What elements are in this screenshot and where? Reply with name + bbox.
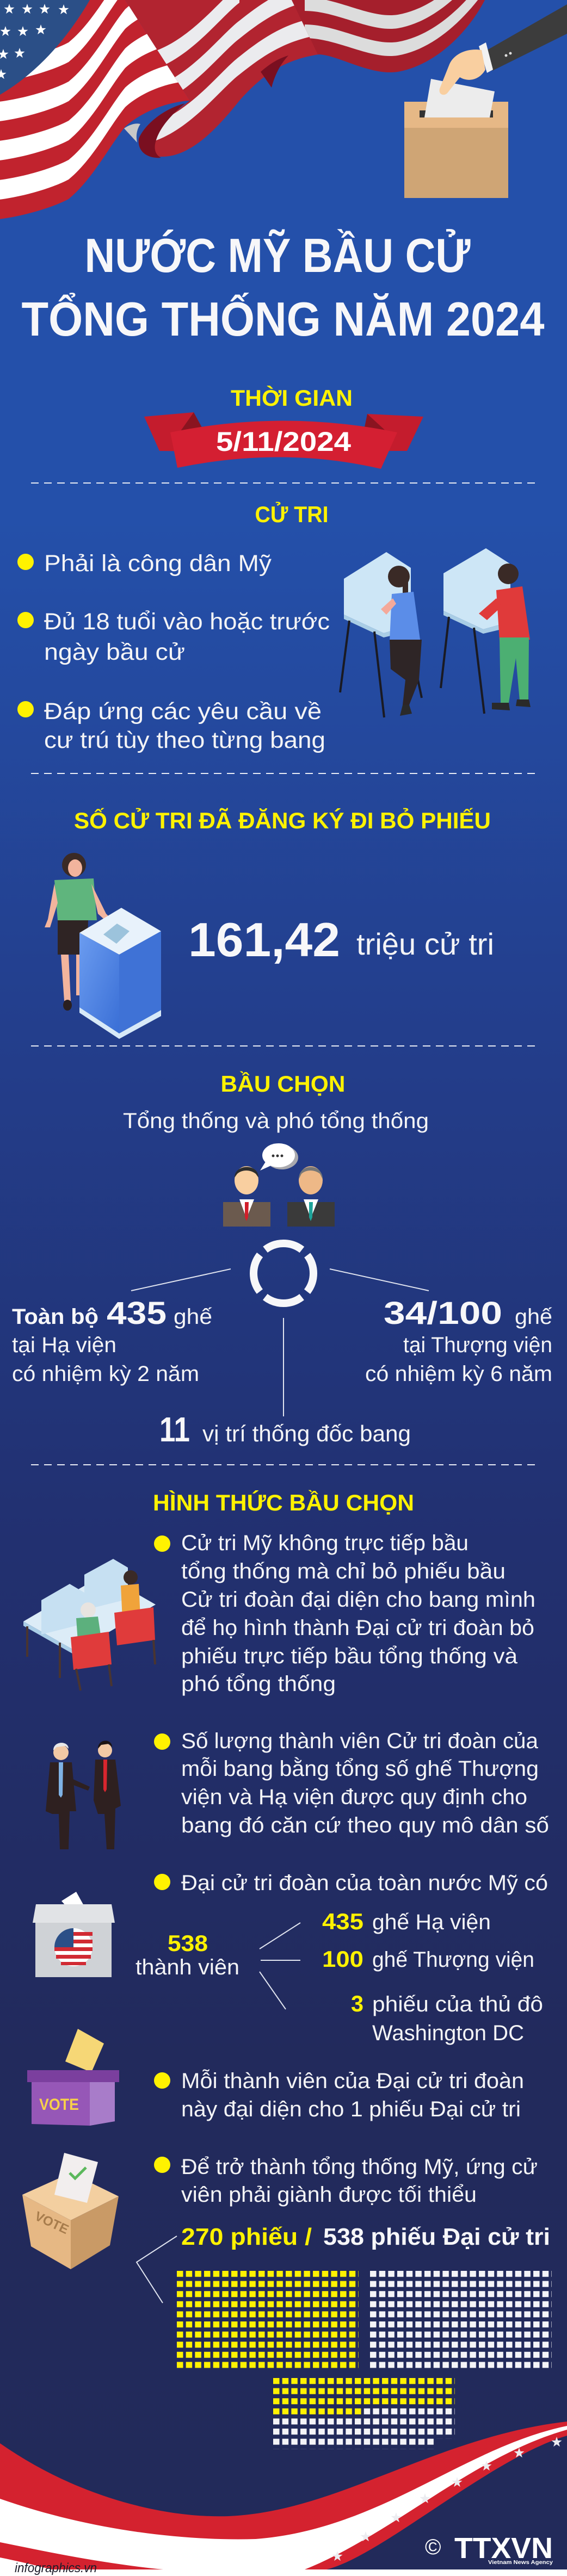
stat: house seats: [12, 1296, 212, 1386]
stat: registered voters number: 161,42: [188, 913, 340, 967]
heading: thời gian: THỜI GIAN: [231, 385, 353, 411]
stat: senate seats: [365, 1296, 552, 1386]
ribbon with date: [144, 412, 423, 469]
illustration: voters in booths: [340, 548, 531, 717]
icon: hand putting ballot into box: [404, 4, 567, 198]
text block: indirect election: tổng thống mà chỉ bỏ phiếu bầu: [181, 1559, 506, 1583]
diagram: 538 breakdown: 100: [322, 1946, 363, 1972]
ribbon with date: 5/11/2024: [216, 426, 351, 457]
list: voter requirements: [17, 550, 330, 753]
text block: indirect election: Cử tri đoàn đại diện cho bang mình: [181, 1588, 535, 1612]
logo: TTXVN: ©: [425, 2535, 441, 2559]
stat: 270 of 538 electoral votes: 538 phiếu Đại cử tri: [323, 2224, 550, 2250]
text block: electors per state: [154, 1729, 549, 1837]
stat: 270 of 538 electoral votes: 270 phiếu /: [181, 2224, 312, 2250]
heading: bầu chọn: BẦU CHỌN: [221, 1071, 345, 1097]
text block: 270 to win: Để trở thành tổng thống Mỹ, ứng cử: [181, 2155, 538, 2179]
list: voter requirements: ngày bầu cử: [44, 639, 185, 665]
text block: indirect election: Cử tri Mỹ không trực tiếp bầu: [181, 1531, 469, 1555]
illustration: two businessmen: [46, 1741, 121, 1849]
icon: grey ballot box with US flag: [33, 1892, 115, 1977]
illustration: voters at desks: [23, 1559, 156, 1691]
stat: house seats: có nhiệm kỳ 2 năm: [12, 1362, 199, 1386]
diagram: 538 breakdown: 435: [322, 1909, 363, 1934]
stat: senate seats: ghế: [515, 1305, 552, 1329]
stat: registered voters number: triệu cử tri: [356, 927, 494, 961]
diagram: 538 breakdown: 3: [351, 1991, 363, 2016]
stat: governors: vị trí thống đốc bang: [202, 1421, 411, 1446]
text block: electors per state: Số lượng thành viên Cử tri đoàn của: [181, 1729, 539, 1753]
list: voter requirements: Phải là công dân Mỹ: [44, 550, 272, 577]
title: NƯỚC MỸ BẦU CỬ: [85, 228, 470, 282]
logo: TTXVN: TTXVN: [454, 2532, 553, 2565]
text block: one elector one vote: này đại diện cho 1 phiếu Đại cử tri: [181, 2097, 521, 2121]
diagram: 538 breakdown: ghế Thượng viện: [372, 1948, 534, 1972]
heading: hình thức bầu chọn: HÌNH THỨC BẦU CHỌN: [153, 1489, 414, 1515]
stat: 270 of 538 electoral votes: [137, 2224, 550, 2303]
text block: 270 to win: [154, 2155, 538, 2207]
diagram: 538 breakdown: Washington DC: [372, 2021, 524, 2045]
list: voter requirements: cư trú tùy theo từng bang: [44, 727, 325, 753]
heading: cử tri: CỬ TRI: [255, 501, 329, 527]
stat: house seats: Toàn bộ: [12, 1305, 98, 1329]
stat: house seats: ghế: [174, 1305, 212, 1329]
logo: TTXVN: Vietnam News Agency: [488, 2560, 553, 2566]
icon: purple VOTE box: VOTE: [39, 2096, 79, 2114]
icon: purple VOTE box: [27, 2029, 119, 2126]
heading: registered voters: SỐ CỬ TRI ĐÃ ĐĂNG KÝ ĐI BỎ PHIẾU: [74, 807, 491, 833]
icon: two candidates with speech bubble: [223, 1143, 335, 1227]
stat: senate seats: tại Thượng viện: [403, 1333, 552, 1357]
stat: house seats: tại Hạ viện: [12, 1333, 116, 1357]
text block: electors per state: mỗi bang bằng tổng số ghế Thượng: [181, 1756, 539, 1781]
footer text: infographics.vn: infographics.vn: [15, 2561, 97, 2575]
diagram: 538 breakdown: phiếu của thủ đô: [372, 1992, 543, 2016]
diagram: 538 breakdown: ghế Hạ viện: [372, 1910, 491, 1934]
stat: senate seats: 34/100: [384, 1296, 502, 1331]
diagram: ring with connector lines: [131, 1243, 429, 1416]
title: [22, 228, 545, 346]
stat: governors: [159, 1410, 411, 1449]
text block: 538 electors: Đại cử tri đoàn của toàn nước Mỹ có: [181, 1871, 548, 1895]
diagram: 538 breakdown: thành viên: [135, 1955, 239, 1979]
illustration: woman casting ballot: [45, 853, 161, 1039]
stat: governors: 11: [159, 1410, 190, 1449]
subtitle: president and vice president: Tổng thống và phó tổng thống: [123, 1109, 429, 1133]
text block: one elector one vote: [154, 2069, 524, 2121]
icon: cardboard vote box with ballot: [22, 2153, 119, 2269]
chart: 538 electoral vote squares: [177, 2271, 552, 2449]
list: voter requirements: Đủ 18 tuổi vào hoặc trước: [44, 609, 330, 635]
text block: 270 to win: viên phải giành được tối thiểu: [181, 2183, 477, 2207]
diagram: 538 breakdown: 538: [168, 1930, 208, 1956]
text block: one elector one vote: Mỗi thành viên của Đại cử tri đoàn: [181, 2069, 524, 2093]
text block: indirect election: để họ hình thành Đại cử tri đoàn bỏ: [181, 1616, 534, 1640]
list: voter requirements: Đáp ứng các yêu cầu về: [44, 698, 322, 725]
text block: electors per state: bang đó căn cứ theo quy mô dân số: [181, 1813, 549, 1837]
stat: house seats: 435: [107, 1296, 167, 1331]
text block: indirect election: [154, 1531, 535, 1696]
stat: registered voters number: [188, 913, 494, 967]
text block: electors per state: viện và Hạ viện được quy định cho: [181, 1785, 527, 1809]
footer: flag swoosh with stars: [0, 2422, 567, 2576]
flag: waving US flag top-left: [0, 0, 490, 228]
text block: indirect election: phó tổng thống: [181, 1672, 336, 1696]
diagram: 538 breakdown: [135, 1909, 543, 2045]
stat: senate seats: có nhiệm kỳ 6 năm: [365, 1362, 552, 1386]
text block: indirect election: phiếu trực tiếp bầu tổng thống và: [181, 1644, 518, 1668]
icon: cardboard vote box with ballot: VOTE: [32, 2209, 71, 2237]
